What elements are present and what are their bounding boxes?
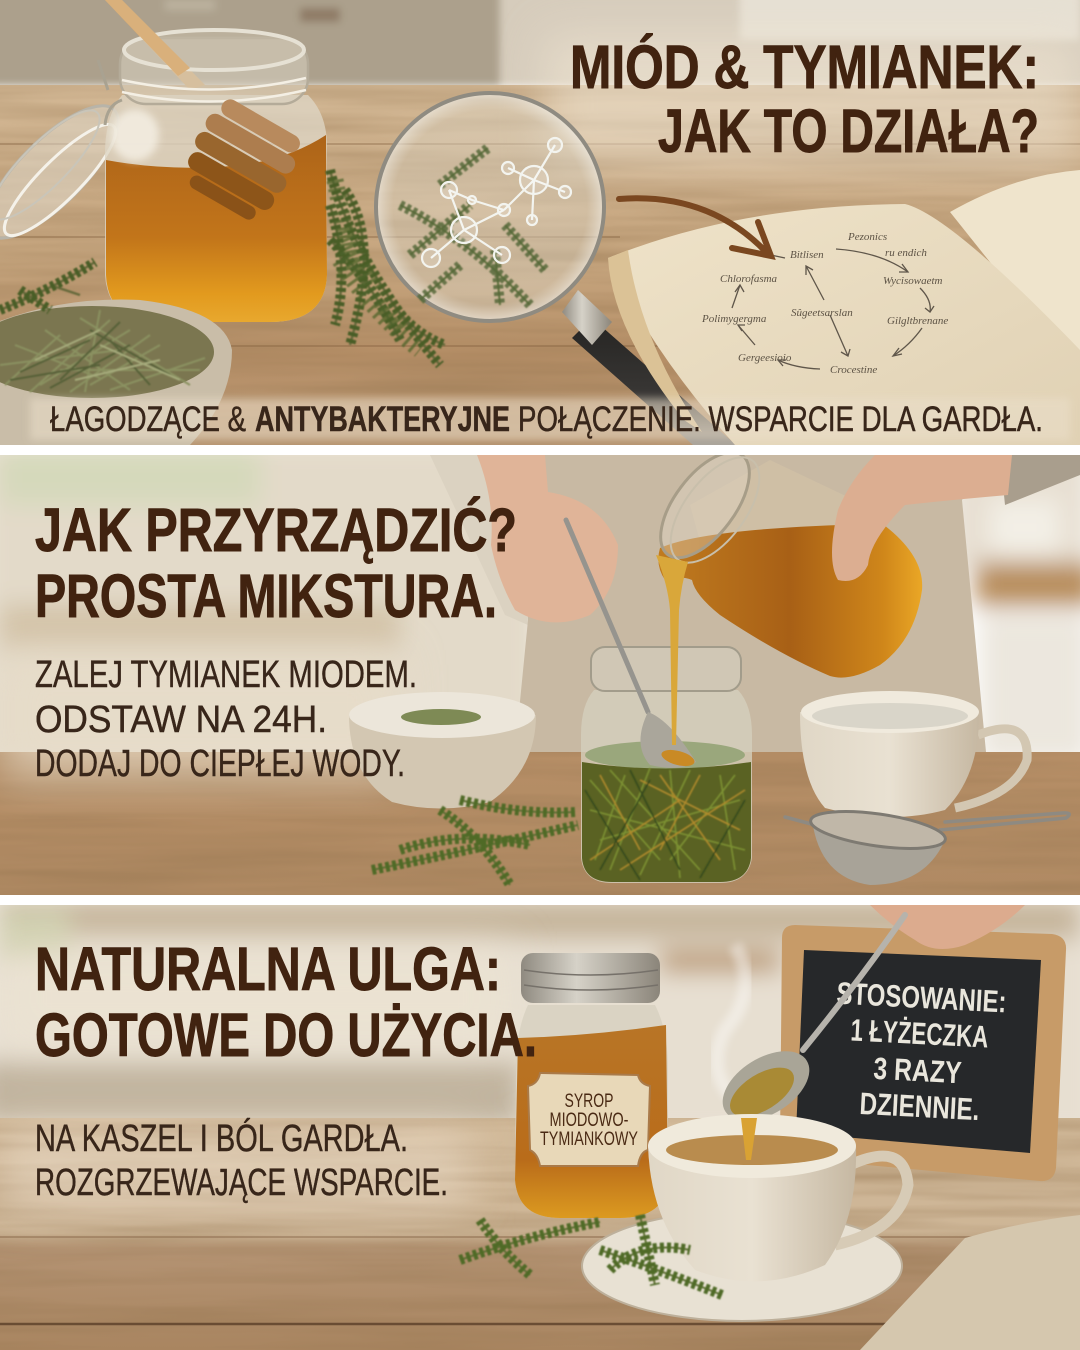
subtitle: ANTYBAKTERYJNE [255,400,510,439]
wooden table [0,752,1080,895]
blurred kitchen background [0,905,1080,1118]
heading: GOTOWE DO UŻYCIA. [35,1001,537,1069]
saucer [582,1211,902,1321]
cycle diagram labels: Bitlisen [790,249,824,261]
tea cup [648,1114,908,1281]
steps: DODAJ DO CIEPŁEJ WODY. [35,743,405,785]
usage instructions: STOSOWANIE: [836,976,1007,1019]
napkin [860,1215,1080,1350]
jar label: MIODOWO- [550,1110,628,1131]
strainer [785,805,1069,885]
jar label: TYMIANKOWY [540,1129,638,1150]
panel: how it works [0,0,1080,445]
jar label [528,1073,650,1166]
usage instructions: 1 ŁYŻECZKA [850,1012,989,1055]
heading [35,935,537,1069]
cycle diagram labels: ru endich [885,247,927,259]
hand with spoon [710,905,1025,1135]
bottom text glow [30,398,1070,440]
text glow [0,752,388,804]
cycle diagram labels: Gilgltbrenane [887,315,948,327]
heading: NATURALNA ULGA: [35,935,501,1003]
syrup jar [515,953,668,1218]
tilted honey jar [658,455,922,678]
cycle diagram labels: Wycisowaetm [883,275,943,287]
blurred kitchen background [0,0,1080,86]
heading [35,496,517,630]
cup [800,691,1027,817]
apron [515,455,990,752]
molecule icon [422,138,571,267]
wooden table [0,1118,1080,1350]
honey stream [656,555,688,745]
cycle diagram labels: Gergeesioio [738,352,792,364]
chalkboard [780,925,1066,1181]
left hand [477,455,618,622]
jar label: SYROP [564,1091,614,1112]
steps: ZALEJ TYMIANEK MIODEM. [35,654,417,696]
small bowl [349,692,536,808]
open book with hand-drawn cycle [608,170,1080,445]
blurred kitchen background [0,440,1080,770]
cycle diagram labels: Chlorofasma [720,273,778,285]
cycle diagram labels [701,231,948,376]
thyme sprig [372,800,578,885]
benefits [35,1117,448,1204]
cycle diagram labels: Sûgeetsarslan [791,307,853,319]
steps: ODSTAW NA 24H. [35,699,327,741]
usage instructions: DZIENNIE. [859,1086,980,1127]
bowl of dried thyme [0,300,232,445]
steps [36,660,414,777]
cycle diagram labels: Pezonics [847,231,887,243]
title [570,33,1039,165]
usage instructions [836,976,1007,1127]
honey jar with dipper [98,0,327,322]
glass lid [0,104,116,240]
wooden table [0,85,1080,445]
title backdrop glow [545,35,1080,165]
heading: PROSTA MIKSTURA. [35,562,497,630]
thyme sprigs [460,1215,722,1295]
steam [717,945,745,1100]
text glow [0,945,510,1210]
subtitle: ŁAGODZĄCE & [50,400,246,439]
thyme sprigs [0,170,445,365]
cycle diagram labels: Crocestine [830,364,877,376]
cycle arrows [732,249,934,369]
mason jar with thyme [581,647,752,883]
panel: ready to use [0,890,1080,1350]
right hand [832,455,1080,581]
benefits: ROZGRZEWAJĄCE WSPARCIE. [35,1162,448,1204]
magnifying glass [376,93,736,445]
usage instructions: 3 RAZY [873,1051,963,1090]
subtitle [50,406,1041,439]
heading: JAK PRZYRZĄDZIĆ? [35,496,517,564]
torso and sleeve [430,455,528,625]
spoon [566,520,696,769]
benefits: NA KASZEL I BÓL GARDŁA. [35,1117,408,1160]
brown arrow [619,198,771,256]
panel: preparation [0,437,1080,895]
cycle diagram labels: Polimygergma [701,313,767,325]
